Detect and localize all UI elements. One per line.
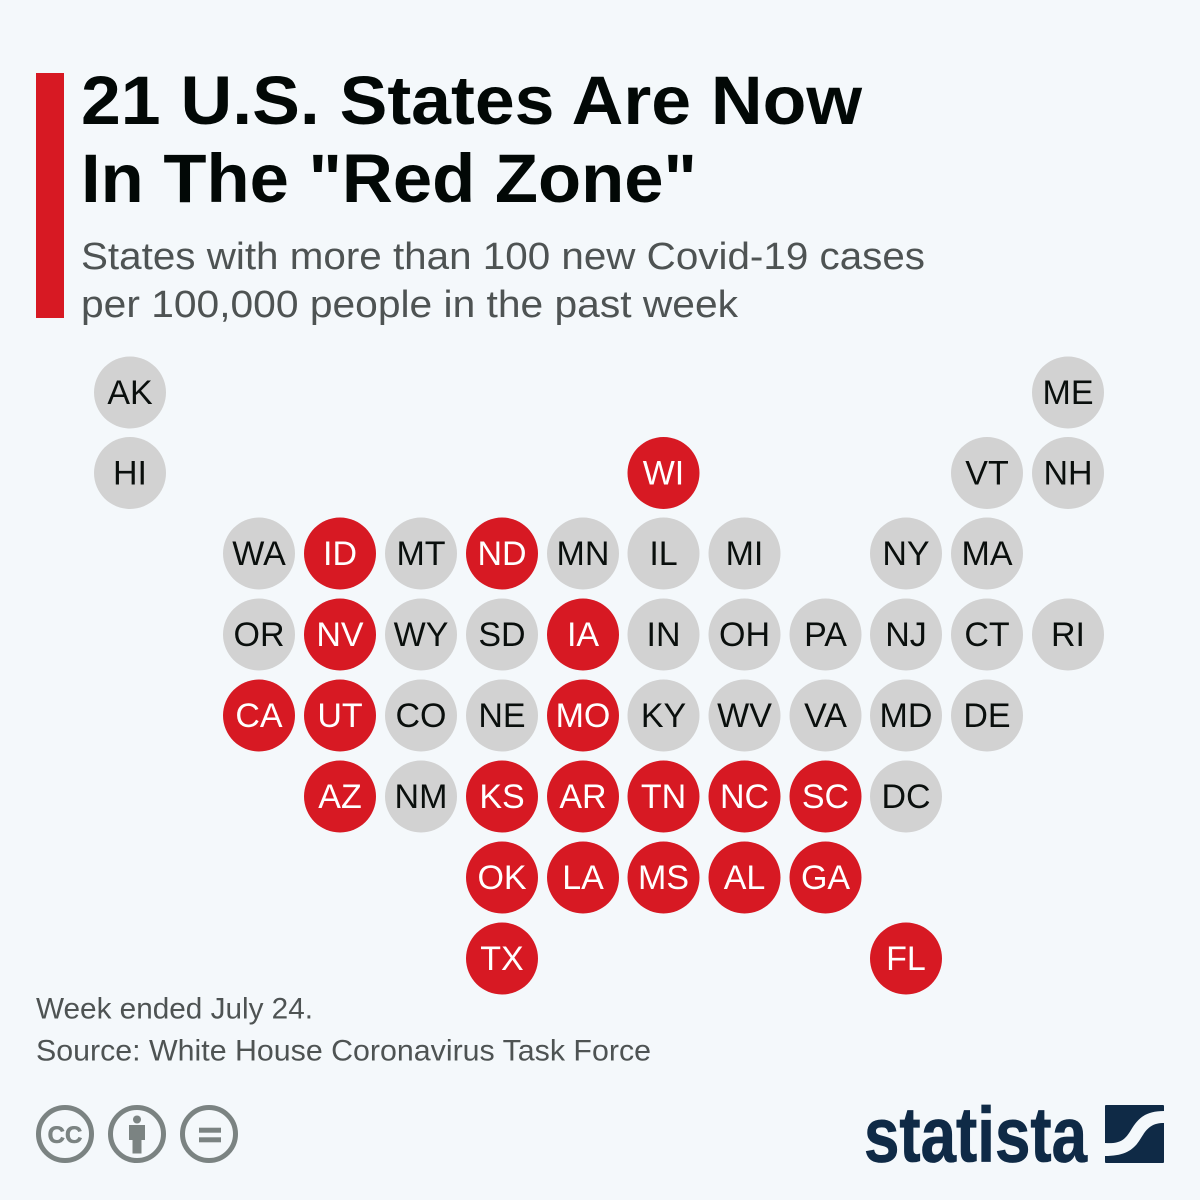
state: MI bbox=[708, 518, 780, 590]
footnote and source bbox=[36, 992, 651, 1068]
state: SD: SD bbox=[478, 616, 526, 654]
state: AZ: AZ bbox=[318, 778, 362, 816]
state: DE bbox=[951, 680, 1023, 752]
state: CO: CO bbox=[396, 697, 446, 735]
icon: creative commons CC bbox=[38, 1108, 92, 1160]
state: MT: MT bbox=[396, 535, 446, 573]
state: MA: MA bbox=[962, 535, 1013, 573]
state: DC: DC bbox=[881, 778, 931, 816]
state: TX bbox=[466, 922, 538, 994]
state: WV bbox=[708, 680, 780, 752]
statista wordmark: statista bbox=[864, 1090, 1087, 1178]
state: VA bbox=[790, 680, 862, 752]
subtitle: per 100,000 people in the past week bbox=[81, 284, 739, 326]
state: SC: SC bbox=[802, 778, 849, 816]
state: TX: TX bbox=[480, 940, 524, 978]
state: MS bbox=[628, 842, 700, 914]
state: NY bbox=[870, 518, 942, 590]
state: MT bbox=[385, 518, 457, 590]
state: WV: WV bbox=[717, 697, 772, 735]
state: NH bbox=[1032, 437, 1104, 509]
footnote and source: Week ended July 24. bbox=[36, 992, 313, 1026]
state: LA: LA bbox=[562, 859, 604, 897]
state: WY bbox=[385, 598, 457, 670]
statista logo mark bbox=[1105, 1105, 1164, 1163]
state: UT bbox=[304, 680, 376, 752]
state: NV bbox=[304, 598, 376, 670]
state: IA: IA bbox=[567, 616, 599, 654]
state: VT bbox=[951, 437, 1023, 509]
subtitle: States with more than 100 new Covid-19 cases bbox=[81, 236, 925, 278]
icon: creative commons CC: CC bbox=[48, 1122, 82, 1149]
state: MA bbox=[951, 518, 1023, 590]
state: AK bbox=[94, 356, 166, 428]
state: NJ: NJ bbox=[885, 616, 927, 654]
state: ME: ME bbox=[1042, 374, 1094, 412]
state: IL: IL bbox=[649, 535, 678, 573]
state: GA: GA bbox=[801, 859, 850, 897]
state: WA bbox=[223, 518, 295, 590]
icon: no derivatives equals bbox=[182, 1108, 236, 1160]
title: In The "Red Zone" bbox=[81, 140, 697, 217]
state: IL bbox=[628, 518, 700, 590]
state: MN: MN bbox=[557, 535, 609, 573]
state: MD bbox=[870, 680, 942, 752]
state: MI: MI bbox=[726, 535, 763, 573]
state: DE: DE bbox=[963, 697, 1011, 735]
state: HI bbox=[94, 437, 166, 509]
state: CA: CA bbox=[235, 697, 283, 735]
state: RI bbox=[1032, 598, 1104, 670]
state: FL: FL bbox=[886, 940, 926, 978]
state: OR bbox=[223, 598, 295, 670]
state: MN bbox=[547, 518, 619, 590]
footnote and source: Source: White House Coronavirus Task Force bbox=[36, 1034, 651, 1068]
state: ID: ID bbox=[323, 535, 357, 573]
state: NC bbox=[708, 760, 780, 832]
state: OH: OH bbox=[719, 616, 770, 654]
title bbox=[81, 62, 862, 217]
state: IN bbox=[628, 598, 700, 670]
title: 21 U.S. States Are Now bbox=[81, 62, 862, 139]
subtitle bbox=[81, 236, 925, 326]
state: PA bbox=[790, 598, 862, 670]
icon: attribution person bbox=[110, 1108, 164, 1160]
state: VT: VT bbox=[965, 454, 1009, 492]
state: SC bbox=[790, 760, 862, 832]
state: NE bbox=[466, 680, 538, 752]
state: MD: MD bbox=[880, 697, 932, 735]
state: HI: HI bbox=[113, 454, 147, 492]
state: KY bbox=[628, 680, 700, 752]
state: OK bbox=[466, 842, 538, 914]
state: IN: IN bbox=[646, 616, 680, 654]
state: SD bbox=[466, 598, 538, 670]
state: NE: NE bbox=[478, 697, 526, 735]
state: CT: CT bbox=[964, 616, 1010, 654]
state: CA bbox=[223, 680, 295, 752]
state: MO: MO bbox=[556, 697, 610, 735]
state: RI: RI bbox=[1051, 616, 1085, 654]
state: AZ bbox=[304, 760, 376, 832]
state: NC: NC bbox=[720, 778, 769, 816]
state: AR bbox=[547, 760, 619, 832]
state: WI: WI bbox=[643, 454, 684, 492]
state: OR: OR bbox=[234, 616, 284, 654]
state: CO bbox=[385, 680, 457, 752]
state: IA bbox=[547, 598, 619, 670]
state: VA: VA bbox=[804, 697, 847, 735]
state: NY: NY bbox=[882, 535, 930, 573]
state: ME bbox=[1032, 356, 1104, 428]
state: ND: ND bbox=[477, 535, 527, 573]
state: CT bbox=[951, 598, 1023, 670]
state: NJ bbox=[870, 598, 942, 670]
state: AL: AL bbox=[724, 859, 765, 897]
state: KS bbox=[466, 760, 538, 832]
state: TN: TN bbox=[641, 778, 686, 816]
state: DC bbox=[870, 760, 942, 832]
state: ND bbox=[466, 518, 538, 590]
state: UT: UT bbox=[317, 697, 363, 735]
state: TN bbox=[628, 760, 700, 832]
state: NM bbox=[385, 760, 457, 832]
state: AL bbox=[708, 842, 780, 914]
state tile map bbox=[94, 356, 1104, 994]
state: MO bbox=[547, 680, 619, 752]
state: ID bbox=[304, 518, 376, 590]
state: GA bbox=[790, 842, 862, 914]
state: FL bbox=[870, 922, 942, 994]
state: AK: AK bbox=[107, 374, 153, 412]
state: PA: PA bbox=[804, 616, 847, 654]
state: NM: NM bbox=[395, 778, 447, 816]
state: WY: WY bbox=[394, 616, 448, 654]
state: WA: WA bbox=[232, 535, 286, 573]
state: NV: NV bbox=[316, 616, 364, 654]
state: OK: OK bbox=[477, 859, 527, 897]
state: KS: KS bbox=[479, 778, 525, 816]
state: OH bbox=[708, 598, 780, 670]
state: LA bbox=[547, 842, 619, 914]
state: NH: NH bbox=[1043, 454, 1093, 492]
accent bar bbox=[36, 73, 64, 318]
state: AR: AR bbox=[559, 778, 607, 816]
state: MS: MS bbox=[638, 859, 689, 897]
state: WI bbox=[628, 437, 700, 509]
state: KY: KY bbox=[641, 697, 686, 735]
